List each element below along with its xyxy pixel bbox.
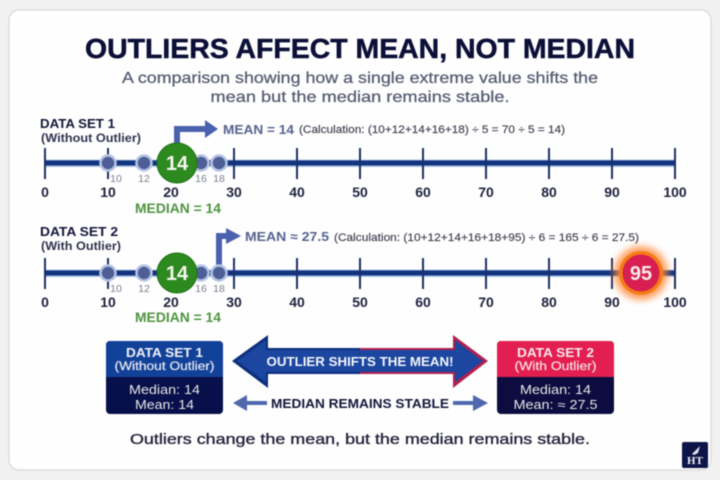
number line 1: 80 — [541, 184, 557, 200]
summary box: data set 2: Mean: ≈ 27.5 — [514, 398, 598, 412]
median circle 2 — [157, 253, 197, 293]
data points set 1: 18 — [213, 173, 225, 185]
median circle 1 — [157, 143, 197, 183]
number line 1: 90 — [604, 184, 620, 200]
data set 2 label — [40, 224, 121, 253]
calculation 2: (Calculation: (10+12+14+16+18+95) ÷ 6 = 165 ÷ 6 = 27.5) — [334, 232, 639, 244]
double arrow: outlier shifts the mean — [232, 335, 488, 388]
data points set 2: 16 — [195, 283, 207, 295]
data points set 2: 10 — [110, 283, 122, 295]
icon: HT logo — [682, 442, 708, 468]
mean label 1: MEAN = 14 — [223, 122, 295, 137]
title: OUTLIERS AFFECT MEAN, NOT MEDIAN — [85, 33, 635, 64]
mean arrow 1 — [174, 120, 218, 143]
number line 1: 10 — [100, 184, 116, 200]
data points set 2: 12 — [138, 283, 150, 295]
summary box: data set 2: (With Outlier) — [514, 361, 597, 373]
number line 1: 0 — [41, 184, 49, 200]
outlier circle 95 — [614, 246, 668, 300]
data points set 2: 18 — [213, 283, 225, 295]
median circle 1: 14 — [166, 153, 189, 175]
summary box: data set 2 — [497, 341, 614, 414]
conclusion text: Outliers change the mean, but the median remains stable. — [130, 431, 590, 448]
data set 1 label: (Without Outlier) — [41, 131, 141, 145]
number line 1: 30 — [226, 184, 242, 200]
data points set 1: 16 — [195, 173, 207, 185]
summary box: data set 1: (Without Outlier) — [114, 361, 215, 373]
number line 1: 50 — [352, 184, 368, 200]
outlier circle 95: 95 — [630, 263, 652, 285]
data points set 1: 10 — [110, 173, 122, 185]
number line 2: 0 — [41, 294, 49, 310]
data set 1 label — [40, 116, 141, 145]
double arrow: outlier shifts the mean: OUTLIER SHIFTS THE MEAN! — [266, 354, 454, 369]
subtitle: mean but the median remains stable. — [210, 89, 510, 106]
number line 2: 30 — [226, 294, 242, 310]
summary box: data set 1: DATA SET 1 — [126, 346, 203, 360]
number line 2 — [41, 258, 687, 310]
mean label 2: MEAN ≈ 27.5 — [245, 229, 329, 244]
median circle 2: 14 — [166, 263, 189, 285]
data set 2 label: (With Outlier) — [41, 239, 121, 253]
icon: HT logo: HT — [687, 455, 704, 467]
number line 2: 60 — [415, 294, 431, 310]
number line 1: 60 — [415, 184, 431, 200]
number line 1: 40 — [289, 184, 305, 200]
number line 2: 50 — [352, 294, 368, 310]
summary box: data set 1: Median: 14 — [129, 383, 200, 397]
median label 1: MEDIAN = 14 — [135, 200, 221, 216]
number line 1: 100 — [663, 184, 687, 200]
number line 2: 20 — [163, 294, 179, 310]
summary box: data set 1 — [106, 341, 223, 414]
median label 2: MEDIAN = 14 — [135, 309, 221, 325]
number line 1: 70 — [478, 184, 494, 200]
mean arrow 2 — [216, 228, 241, 265]
number line 2: 40 — [289, 294, 305, 310]
summary box: data set 2: DATA SET 2 — [517, 346, 594, 360]
arrow: median remains stable — [233, 395, 488, 411]
summary box: data set 1: Mean: 14 — [135, 398, 194, 412]
number line 2: 90 — [604, 294, 620, 310]
data set 2 label: DATA SET 2 — [40, 224, 118, 239]
number line 1: 20 — [163, 184, 179, 200]
number line 2: 80 — [541, 294, 557, 310]
number line 1 — [41, 148, 687, 200]
data points set 2 — [100, 266, 226, 295]
summary box: data set 2: Median: 14 — [520, 383, 591, 397]
number line 2: 70 — [478, 294, 494, 310]
data points set 1: 12 — [138, 173, 150, 185]
arrow: median remains stable: MEDIAN REMAINS STABLE — [271, 396, 449, 411]
number line 2: 10 — [100, 294, 116, 310]
data set 1 label: DATA SET 1 — [40, 116, 115, 131]
subtitle: A comparison showing how a single extreme value shifts the — [122, 70, 598, 87]
calculation 1: (Calculation: (10+12+14+16+18) ÷ 5 = 70 ÷ 5 = 14) — [299, 124, 565, 136]
subtitle — [122, 70, 598, 106]
data points set 1 — [100, 156, 226, 185]
number line 2: 100 — [663, 294, 687, 310]
